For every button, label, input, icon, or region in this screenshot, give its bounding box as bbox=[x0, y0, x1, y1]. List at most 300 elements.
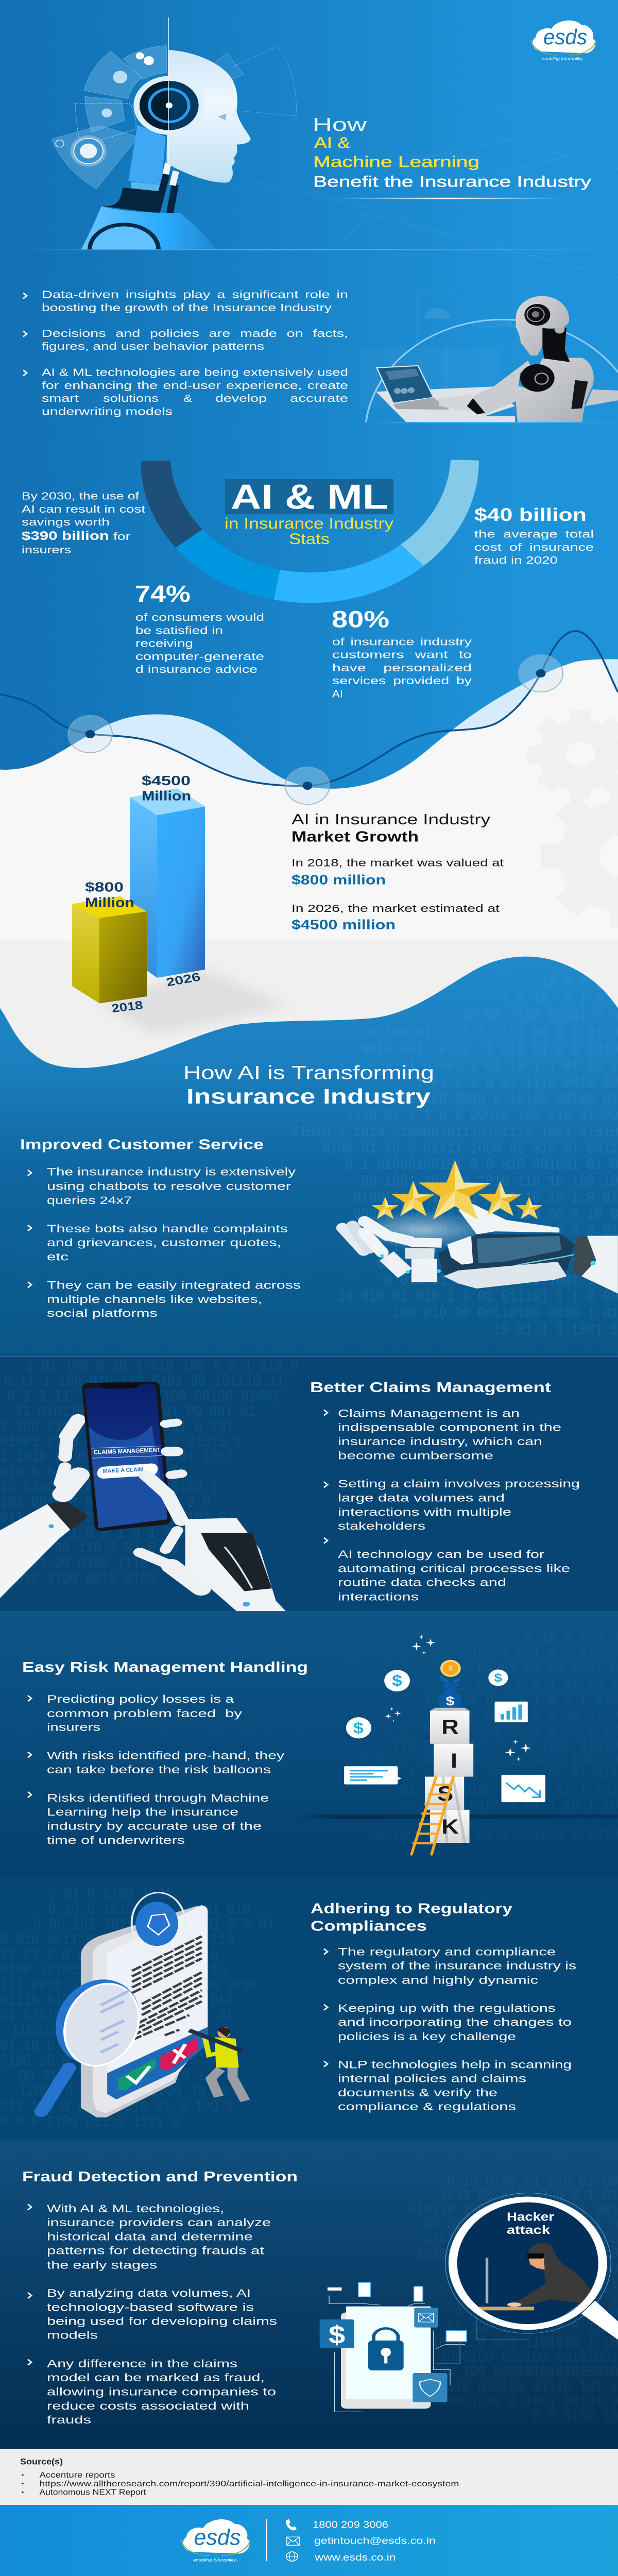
bullet bbox=[324, 2058, 572, 2113]
floor band bbox=[291, 1815, 618, 1819]
text: 0 10 0100 01 010 01 00 bbox=[447, 2173, 618, 2190]
bullet 2 bbox=[23, 328, 348, 352]
text: 0 0 01 00 0100 1110 0 bbox=[0, 1555, 164, 1572]
bullet: compliance & regulations bbox=[338, 2100, 516, 2113]
label $800 Million: $800 bbox=[85, 880, 124, 895]
logo: esds top: enabling futurability.. bbox=[542, 57, 585, 61]
bullet: NLP technologies help in scanning bbox=[338, 2058, 572, 2071]
bullet: reduce costs associated with bbox=[47, 2400, 249, 2412]
bar shadow bbox=[99, 970, 288, 1034]
text: 100 01001 00 00 1001 0 bbox=[447, 1662, 618, 1679]
contact: web bbox=[286, 2552, 396, 2563]
marker 1 bbox=[68, 716, 112, 753]
hacker figure bbox=[479, 2243, 591, 2316]
text: 0 1 1 11 0100 11 0 100 00100 01001 bbox=[7, 1388, 280, 1405]
tower letters: I bbox=[451, 1750, 457, 1772]
tower letters: S bbox=[437, 1783, 453, 1805]
right fingers bbox=[140, 1422, 201, 1588]
illustration: robot hand with stars bbox=[342, 1160, 618, 1294]
stat: $40 billion: cost of insurance bbox=[474, 541, 594, 553]
text: 0010 001 0101 1 010 01 0 0 1010 bbox=[361, 1041, 618, 1059]
stars bbox=[371, 1160, 543, 1219]
stat: $40 billion: fraud in 2020 bbox=[474, 554, 558, 566]
bullet 3: solutions bbox=[103, 393, 159, 404]
regulatory text: Compliances bbox=[311, 1918, 427, 1934]
text: 11000 0 0 0010 1 1000 10 10 0 bbox=[19, 2083, 244, 2100]
phone bbox=[341, 2312, 431, 2409]
bullet: the early stages bbox=[47, 2259, 157, 2271]
text: 0010 01 0 0 0001 01 0010 0 0 0 01 bbox=[361, 1223, 618, 1240]
dollar tile bbox=[320, 2319, 354, 2348]
text: 0 1 01000100101 0 0 010 001001 01 0 bbox=[346, 1157, 618, 1174]
text: 01110 010 0 0 1 0 0 100 10 010 bbox=[0, 1992, 234, 2009]
text: 001010 1 0 00 1 01 001 0 1 0 10 bbox=[377, 1256, 618, 1273]
contact: email: getintouch@esds.co.in bbox=[314, 2536, 436, 2546]
bullet: With AI & ML technologies, bbox=[47, 2202, 224, 2214]
stat: 74%: d insurance advice bbox=[135, 664, 258, 675]
globe dial bbox=[56, 135, 107, 167]
logo: esds footer: enabling futurability.. bbox=[193, 2557, 238, 2562]
person bbox=[189, 2027, 245, 2101]
stat: 80%: of insurance industry bbox=[332, 636, 472, 648]
stat: $390 billion: insurers bbox=[22, 544, 71, 555]
text: 10 0011 0 1 0 1 0 1 1 010 bbox=[423, 1692, 618, 1709]
label $4500 Million: Million bbox=[142, 789, 191, 804]
text: 1 0 10 0 1 0 0 bbox=[501, 992, 618, 1009]
market growth text bbox=[291, 811, 504, 933]
bullet bbox=[28, 2287, 277, 2341]
bullet: With risks identified pre-hand, they bbox=[47, 1749, 285, 1761]
heading: Fraud Detection and Prevention bbox=[22, 2169, 298, 2185]
text: 101 0010 0 0 01011 1 11 0 0 bbox=[0, 1495, 210, 1512]
stat: 74% bbox=[135, 581, 264, 675]
magnifier rim bbox=[445, 2193, 611, 2333]
laptop bbox=[377, 366, 434, 403]
panel: sources bbox=[0, 2449, 618, 2505]
bullet: Predicting policy losses is a bbox=[47, 1693, 234, 1705]
2018 bar bbox=[72, 896, 147, 1003]
gears bbox=[136, 52, 154, 65]
text: 01 10 0 1 0 0 01 01001 0 bbox=[0, 2038, 187, 2055]
bullet: being used for developing claims bbox=[47, 2315, 277, 2327]
sparkles bbox=[385, 1635, 531, 1761]
bullet: and grievances, customer quotes, bbox=[47, 1236, 281, 1249]
ear disc bbox=[133, 76, 204, 135]
bullet: insurance industry, which can bbox=[338, 1435, 542, 1448]
stats heading bbox=[225, 478, 394, 548]
text: 11 01 0 0 0 0 1 10 1 01 01 0 bbox=[0, 1947, 218, 1964]
money bag bbox=[438, 1684, 461, 1710]
panel: improved customer service bbox=[20, 1137, 301, 1319]
top blue hero panel bbox=[0, 0, 618, 793]
bullet: They can be easily integrated across bbox=[47, 1279, 301, 1291]
bullet: large data volumes and bbox=[338, 1492, 505, 1504]
circuit lines bbox=[329, 2296, 465, 2412]
footer divider bbox=[266, 2519, 267, 2561]
dollar symbols: $ bbox=[392, 1672, 403, 1689]
logo: esds footer bbox=[181, 2519, 250, 2562]
envelope tile bbox=[414, 2308, 438, 2328]
bullet 3: accurate bbox=[290, 393, 348, 404]
bullet: indispensable component in the bbox=[338, 1421, 561, 1433]
title: AI & bbox=[314, 134, 350, 151]
text: 010 1 0 01 10 00 01 0 01 01 011 bbox=[377, 1768, 618, 1785]
torso bbox=[516, 358, 594, 422]
neck bbox=[539, 327, 570, 362]
tower letters bbox=[437, 1716, 459, 1838]
heading: Better Claims Management bbox=[310, 1379, 551, 1395]
bar chart card bbox=[495, 1702, 528, 1722]
illustration: robot hands holding phone bbox=[0, 1382, 286, 1611]
plant coin bbox=[439, 1660, 461, 1683]
tower letters: K bbox=[441, 1816, 459, 1838]
bullet bbox=[324, 1538, 570, 1603]
text: 0100 101001 0 1 1 11 0 0 0010 bbox=[0, 1962, 226, 1979]
marker 3 bbox=[519, 655, 563, 692]
text: 01 01 1 0100 1001 0 01 1 101 bbox=[400, 1783, 618, 1800]
text: 1 01 100 0 10 1 010 100 0 0 1 010 0 bbox=[26, 1358, 299, 1375]
market growth text: $4500 million bbox=[291, 918, 396, 933]
text: 1011 00 0100 0 0 0 1 01 bbox=[439, 2187, 618, 2204]
text: 01001 01 0 01 0 1 001 0 01010 1 bbox=[0, 1434, 242, 1451]
text: 10 0100 01 010 0 10 0 0100 1 bbox=[0, 1479, 218, 1497]
text: 01 0 0 0 1 0 10 0 10 0 10 bbox=[423, 1722, 618, 1739]
text: 011 1 0 0 0100 0010 01 0 100 1 bbox=[0, 2098, 234, 2116]
bullet bbox=[324, 1407, 561, 1462]
bullet bbox=[28, 1165, 296, 1207]
hero divider bbox=[0, 249, 618, 250]
dollar symbols: $ bbox=[353, 1720, 364, 1737]
text: 00 010010 001 1 1 0 0 1 0 bbox=[423, 2216, 618, 2234]
text: 0 0100 1 001 0 1 01 00 bbox=[447, 1647, 618, 1664]
axis labels: 2026 bbox=[165, 970, 202, 989]
bullet: and incorporating the changes to bbox=[338, 2016, 572, 2028]
bullet: using chatbots to resolve customer bbox=[47, 1180, 291, 1192]
bullet: Claims Management is an bbox=[338, 1407, 520, 1419]
phone screen labels: MAKE A CLAIM bbox=[102, 1466, 144, 1475]
bullet: queries 24x7 bbox=[47, 1194, 132, 1207]
bullet 2: figures, and user behavior patterns bbox=[42, 341, 264, 352]
bullet 1: Data-driven insights play a significant role in bbox=[42, 289, 348, 300]
text: 0 010 1100 0010 0100 bbox=[0, 1570, 156, 1588]
stats heading: Stats bbox=[289, 531, 330, 548]
label: hacker attack: attack bbox=[507, 2224, 550, 2236]
text: 010110 100 1011 0 0 1 1 001 bbox=[408, 2202, 618, 2219]
bullet: time of underwriters bbox=[47, 1834, 185, 1846]
stat: $40 billion bbox=[474, 505, 594, 566]
intro bullets bbox=[23, 289, 348, 417]
arm bbox=[467, 361, 537, 415]
bullet: routine data checks and bbox=[338, 1576, 506, 1588]
cables bbox=[156, 174, 175, 213]
contact: web: www.esds.co.in bbox=[314, 2553, 396, 2563]
text: 10 01 1 1 1001 1 bbox=[493, 1321, 618, 1338]
desk bbox=[376, 386, 515, 422]
source list: https://www.alltheresearch.com/report/390/artificial-intelligence-in-insurance-market-ecosystem bbox=[39, 2479, 459, 2488]
head bbox=[516, 296, 569, 355]
lower pale band bbox=[0, 941, 618, 1071]
wave: pale panel bbox=[0, 631, 618, 941]
label $4500 Million: $4500 bbox=[142, 773, 191, 789]
stat: 74%: be satisfied in bbox=[135, 624, 223, 636]
text: 00010 01000 010 10 1 010 00 0 10 0 bbox=[353, 1206, 618, 1224]
footer bbox=[0, 2505, 618, 2576]
text: 0100 01 10 0 01111 1000 01 010 01 0011 bbox=[322, 1140, 618, 1158]
bullet: allowing insurance companies to bbox=[47, 2385, 276, 2398]
text: 1010100 0011 1 0 0 1000 10 bbox=[416, 2246, 618, 2263]
dollar symbols bbox=[353, 1665, 502, 1737]
illustration: RISK tower bbox=[344, 1635, 545, 1854]
title bbox=[313, 114, 592, 190]
make a claim button bbox=[97, 1463, 158, 1479]
bullet bbox=[28, 1223, 288, 1263]
panel: regulatory compliance bbox=[0, 1875, 618, 2141]
title: Benefit the Insurance Industry bbox=[313, 173, 592, 190]
dollar tile symbol: $ bbox=[329, 2321, 345, 2349]
bullet: Keeping up with the regulations bbox=[338, 2002, 556, 2014]
text: 110 010 1010 0 1 0 1001 01010 bbox=[392, 1737, 618, 1755]
text: 010 0 0 1 1 01010 0 0 10 bbox=[0, 1464, 187, 1481]
contact: phone: 1800 209 3006 bbox=[313, 2520, 388, 2530]
logo: esds footer: esds bbox=[194, 2525, 241, 2550]
bullet 3: for enhancing the end-user experience, create bbox=[42, 380, 348, 391]
bullet bbox=[28, 1749, 285, 1776]
illustration: AI robot head bbox=[52, 18, 297, 249]
segment: 74% bbox=[176, 530, 280, 600]
bullet bbox=[324, 2002, 572, 2042]
stats heading: in Insurance Industry bbox=[225, 515, 394, 532]
bullet: insurance providers can analyze bbox=[47, 2216, 271, 2228]
reject button bbox=[160, 2037, 198, 2071]
bullet: Setting a claim involves processing bbox=[338, 1478, 580, 1490]
bullet bbox=[28, 1792, 269, 1846]
magnifier bbox=[41, 1975, 149, 2112]
text: 0 0 0100 10 bbox=[533, 2408, 618, 2426]
dollar symbols: $ bbox=[494, 1672, 502, 1685]
tower letters: R bbox=[441, 1716, 459, 1739]
bullet bbox=[28, 1693, 243, 1733]
HUD wedges bbox=[52, 46, 244, 189]
text: 01 01010 1 1 0 01 1110 1001 01 bbox=[0, 2008, 234, 2025]
bullet: interactions with multiple bbox=[338, 1506, 511, 1518]
marker 2 bbox=[285, 767, 330, 804]
label: hacker attack bbox=[507, 2211, 554, 2236]
message card bbox=[344, 1766, 402, 1785]
dollar coins bbox=[346, 1670, 508, 1738]
bullet: interactions bbox=[338, 1590, 419, 1603]
title: Machine Learning bbox=[313, 154, 479, 170]
lock bbox=[368, 2328, 404, 2370]
phone screen labels bbox=[93, 1446, 161, 1475]
title: How bbox=[313, 114, 367, 135]
illustration: fraud security phone bbox=[320, 2193, 618, 2412]
bullet 3: develop bbox=[215, 393, 267, 404]
bullet 2: Decisions and policies are made on facts, bbox=[42, 328, 348, 339]
fraud text bbox=[22, 2169, 298, 2426]
bullet: multiple channels like websites, bbox=[47, 1293, 262, 1306]
shield tile bbox=[413, 2373, 448, 2402]
right hand bbox=[185, 1518, 286, 1611]
stat: 80%: customers want to bbox=[332, 649, 472, 660]
faint hero geometric decoration bbox=[258, 78, 618, 278]
bullet 1 bbox=[23, 289, 348, 313]
market growth text: In 2026, the market estimated at bbox=[291, 903, 500, 914]
label $800 Million bbox=[85, 880, 134, 910]
stat: $390 billion: AI can result in cost bbox=[22, 503, 145, 515]
bullet 3: smart bbox=[42, 393, 79, 404]
bullet: automating critical processes like bbox=[338, 1563, 570, 1574]
bullet: internal policies and claims bbox=[338, 2072, 526, 2084]
bullet: policies is a key challenge bbox=[338, 2030, 516, 2042]
market growth text: $800 million bbox=[291, 873, 386, 888]
stat: 74%: receiving bbox=[135, 637, 193, 649]
title underline bbox=[335, 198, 563, 199]
side vent bbox=[571, 380, 588, 409]
text: 00 10 01 0101 1 01 1 10 1 10 bbox=[400, 1798, 618, 1815]
illustration: robot at laptop bbox=[365, 295, 618, 423]
heading: How AI is Transforming: How AI is Transforming bbox=[183, 1062, 434, 1083]
bullet bbox=[324, 1478, 580, 1532]
claims text bbox=[310, 1379, 580, 1603]
bullet: model can be marked as fraud, bbox=[47, 2371, 265, 2384]
bullet bbox=[324, 1946, 576, 1986]
label $4500 Million bbox=[142, 773, 191, 804]
segment: $40 billion bbox=[401, 460, 479, 566]
heading: How AI is Transforming bbox=[183, 1062, 434, 1108]
action band bbox=[107, 2027, 208, 2099]
text: 100 100 0001010101010010 bbox=[431, 2364, 618, 2381]
bullet: insurers bbox=[47, 1721, 100, 1733]
source list: Autonomous NEXT Report bbox=[39, 2487, 146, 2497]
magnifier handle bbox=[581, 2301, 618, 2340]
stat: 80% bbox=[332, 606, 472, 700]
stat: 74%: 74% bbox=[135, 581, 191, 607]
axis labels bbox=[111, 970, 202, 1015]
text: 00 0100 0 0 0 1 010 10 1 1 bbox=[19, 2068, 221, 2086]
market growth pale panel bbox=[0, 737, 618, 941]
paper bbox=[107, 1905, 208, 2073]
heading: Adhering to Regulatory bbox=[311, 1901, 512, 1917]
stat: 80%: AI bbox=[332, 688, 343, 700]
bullet: common problem faced by bbox=[47, 1707, 243, 1719]
text: 00 00 0100 01001 0 0 bbox=[462, 1009, 618, 1026]
text: 1000100 000100 00101001 bbox=[439, 2349, 618, 2366]
axis labels: 2018 bbox=[111, 998, 144, 1015]
market growth text: AI in Insurance Industry bbox=[291, 811, 490, 827]
text: 0 10 0 1 0 0 bbox=[525, 1631, 618, 1648]
device body bbox=[81, 1906, 208, 2117]
bullet bbox=[28, 2358, 276, 2426]
bullet 1: boosting the growth of the Insurance Industry bbox=[42, 302, 332, 313]
contact: phone bbox=[286, 2519, 388, 2530]
text: 1 01 0 1 0 01 1110 0010 10 bbox=[416, 1074, 618, 1092]
stat: 74%: of consumers would bbox=[135, 612, 264, 623]
gears decoration bbox=[527, 710, 618, 928]
stat: $40 billion: the average total bbox=[474, 528, 594, 540]
bullet 3: AI & ML technologies are being extensively used bbox=[42, 366, 348, 378]
bullet: system of the insurance industry is bbox=[338, 1959, 576, 1972]
text: 0101 11100 0 0 01 0001 00 bbox=[423, 2231, 618, 2248]
trend card bbox=[502, 1775, 545, 1802]
approve button bbox=[118, 2058, 156, 2090]
bullet: These bots also handle complaints bbox=[47, 1223, 288, 1234]
source list: Accenture reports bbox=[39, 2470, 115, 2480]
text: 111 0010 00010100 10 bbox=[462, 2261, 618, 2278]
bullet: models bbox=[47, 2329, 98, 2341]
bullet bbox=[28, 2202, 271, 2271]
stats heading: AI & ML bbox=[231, 478, 388, 516]
text: 0 1 10001 0100 01 0 0 bbox=[455, 2305, 618, 2322]
illustration: document review bbox=[41, 1892, 245, 2117]
bullet 3: underwriting models bbox=[42, 405, 173, 417]
2026 bar bbox=[130, 788, 205, 978]
arm bbox=[0, 1504, 83, 1598]
segment: $390 billion bbox=[141, 461, 202, 548]
bullet: Any difference in the claims bbox=[47, 2358, 237, 2370]
text: 10 010 01 010 1 0 01 011101 1 1 0 00 bbox=[338, 1289, 618, 1306]
dollar symbols: $ bbox=[446, 1693, 455, 1708]
dollar symbols: $ bbox=[449, 1665, 453, 1672]
bullet: technology-based software is bbox=[47, 2301, 254, 2313]
face bbox=[166, 50, 251, 182]
text: 010 0 1 bbox=[563, 959, 618, 976]
bullet: Learning help the insurance bbox=[47, 1806, 238, 1818]
phone screen labels: CLAIMS MANAGEMENT bbox=[93, 1446, 161, 1455]
stat: $390 billion: By 2030, the use of bbox=[22, 490, 140, 502]
text: 0 0 0 0100 01110 1101 0 bbox=[0, 2114, 179, 2131]
bullet: social platforms bbox=[47, 1307, 158, 1319]
bullet: can take before the risk balloons bbox=[47, 1764, 271, 1776]
bullet: AI technology can be used for bbox=[338, 1548, 544, 1560]
label $800 Million: Million bbox=[85, 895, 134, 910]
bullet: industry by accurate use of the bbox=[47, 1820, 262, 1832]
text: 10010 1101001 01 0 101000 0 1010 bbox=[369, 1826, 618, 1843]
text: 1 10001010 0 1001 00101 0 bbox=[423, 2394, 618, 2411]
market growth text: Market Growth bbox=[291, 828, 419, 845]
text: 101 0101 1 0 0 1 0 1 0100 bbox=[0, 1525, 195, 1542]
stat: $390 billion: for bbox=[113, 531, 131, 542]
segment: 80% bbox=[274, 545, 424, 603]
light beam bbox=[168, 18, 169, 167]
stat: $40 billion: $40 billion bbox=[474, 505, 587, 525]
bullet: The insurance industry is extensively bbox=[47, 1165, 296, 1178]
logo: esds top: esds bbox=[543, 25, 587, 49]
text: 010011101 1101 1 10 0 10 10 1 0 01 bbox=[353, 1190, 618, 1207]
panel: risk management bbox=[0, 1611, 618, 1875]
text: 01 100 10 11010 0 1110 bbox=[447, 2320, 618, 2337]
heading: Improved Customer Service bbox=[20, 1137, 264, 1153]
text: 1 010 1 0 1000 0 1 bbox=[478, 2290, 618, 2308]
text: 011 0100 1 00 111 1 100 101 0 bbox=[0, 1510, 226, 1527]
stat: 80%: 80% bbox=[332, 606, 389, 632]
dashed outline right bbox=[233, 46, 297, 116]
pen badge bbox=[132, 1892, 185, 1954]
text: 0 00 101 1010 0 1 101 01 0 0 01 bbox=[33, 1917, 275, 1934]
bullet: stakeholders bbox=[338, 1520, 425, 1532]
stat: 80%: services provided by bbox=[332, 675, 472, 687]
text: 0 10 0 1010 1 1 0 0 01 010 bbox=[48, 1901, 251, 1919]
blocks bbox=[425, 1710, 473, 1843]
source list: Source(s) bbox=[20, 2456, 63, 2466]
text: 0 010 0011 0 0 0 01 0 0 0 0110 bbox=[0, 1931, 234, 1949]
bullet: By analyzing data volumes, AI bbox=[47, 2287, 251, 2299]
arc bbox=[365, 318, 618, 422]
bullet: Risks identified through Machine bbox=[47, 1792, 269, 1804]
risk text bbox=[22, 1659, 308, 1846]
text: 0 11 1 100 010 110 0101 00 101110 11 bbox=[4, 1373, 284, 1391]
logo: esds top bbox=[531, 21, 596, 61]
transformation section wave panel bbox=[0, 957, 618, 1356]
